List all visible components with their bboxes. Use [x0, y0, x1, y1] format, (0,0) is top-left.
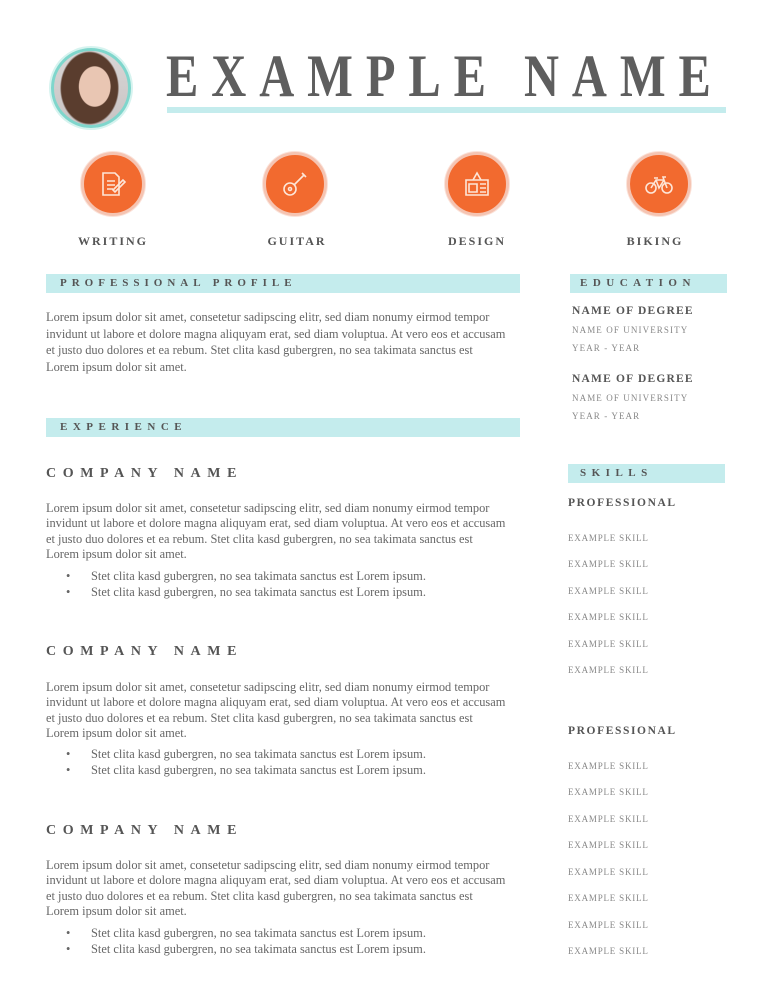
bullets: •: [66, 762, 70, 776]
description: Lorem ipsum dolor sit amet, consetetur sadipscing elitr, sed diam nonumy eirmod tempor: [46, 501, 489, 515]
skills list: EXAMPLE SKILL: [568, 920, 649, 930]
bullets: Stet clita kasd gubergren, no sea takimata sanctus est Lorem ipsum.: [91, 569, 426, 583]
degree 2: NAME OF DEGREE: [572, 373, 694, 385]
heading: experience: EXPERIENCE: [60, 421, 187, 433]
job 3: [46, 823, 506, 956]
skills list: EXAMPLE SKILL: [568, 761, 649, 771]
bullets: Stet clita kasd gubergren, no sea takimata sanctus est Lorem ipsum.: [91, 926, 426, 940]
bullets: •: [66, 584, 70, 598]
heading: professional profile: [46, 274, 520, 293]
description: invidunt ut labore et dolore magna aliquyam erat, sed diam voluptua. At vero eos et accusam: [46, 516, 505, 530]
description: Lorem ipsum dolor sit amet.: [46, 547, 187, 561]
bullets: •: [66, 926, 70, 940]
profile text: Lorem ipsum dolor sit amet, consetetur sadipscing elitr, sed diam nonumy eirmod tempor: [46, 310, 489, 324]
heading: education: [570, 274, 727, 293]
description: Lorem ipsum dolor sit amet, consetetur sadipscing elitr, sed diam nonumy eirmod tempor: [46, 680, 489, 694]
skills list: EXAMPLE SKILL: [568, 639, 649, 649]
bullets: [66, 747, 426, 776]
company name: COMPANY NAME: [46, 823, 243, 838]
skills list: EXAMPLE SKILL: [568, 586, 649, 596]
skills list: EXAMPLE SKILL: [568, 665, 649, 675]
profile text: Lorem ipsum dolor sit amet.: [46, 360, 187, 374]
bullets: [66, 926, 426, 956]
bullets: [66, 569, 426, 598]
skills list: EXAMPLE SKILL: [568, 533, 649, 543]
heading: experience: [46, 418, 520, 437]
heading: skills: SKILLS: [580, 467, 653, 479]
skills list: EXAMPLE SKILL: [568, 893, 649, 903]
skills list: EXAMPLE SKILL: [568, 559, 649, 569]
heading: professional profile: PROFESSIONAL PROFILE: [60, 277, 297, 289]
description: invidunt ut labore et dolore magna aliquyam erat, sed diam voluptua. At vero eos et accusam: [46, 695, 505, 709]
title: EXAMPLE NAME: [166, 43, 724, 109]
skills list: EXAMPLE SKILL: [568, 814, 649, 824]
education entries: [572, 305, 694, 421]
education entries: NAME OF UNIVERSITY: [572, 325, 688, 335]
profile text: et justo duo dolores et ea rebum. Stet clita kasd gubergren, no sea takimata sanctus est: [46, 343, 473, 357]
bullets: Stet clita kasd gubergren, no sea takimata sanctus est Lorem ipsum.: [91, 942, 426, 956]
professional group 1: PROFESSIONAL: [568, 497, 677, 509]
degree 1: NAME OF DEGREE: [572, 305, 694, 317]
icon: design: [445, 152, 509, 216]
education entries: NAME OF UNIVERSITY: [572, 393, 688, 403]
heading: education: EDUCATION: [580, 277, 696, 289]
job 2: [46, 644, 506, 776]
bullets: •: [66, 747, 70, 761]
photo: [51, 48, 131, 128]
hobby icons: [78, 151, 692, 248]
profile text: invidunt ut labore et dolore magna aliquyam erat, sed diam voluptua. At vero eos et accusam: [46, 327, 505, 341]
label: guitar: GUITAR: [267, 234, 327, 248]
bullets: Stet clita kasd gubergren, no sea takimata sanctus est Lorem ipsum.: [91, 584, 426, 598]
description: [46, 858, 506, 918]
skills list: EXAMPLE SKILL: [568, 612, 649, 622]
skills list: [568, 497, 677, 956]
description: Lorem ipsum dolor sit amet.: [46, 904, 187, 918]
title underline: [167, 107, 726, 113]
icon: biking: [627, 152, 691, 216]
description: et justo duo dolores et ea rebum. Stet clita kasd gubergren, no sea takimata sanctus est: [46, 889, 473, 903]
bullets: •: [66, 942, 70, 956]
skills list: EXAMPLE SKILL: [568, 946, 649, 956]
bullets: •: [66, 569, 70, 583]
label: writing: WRITING: [78, 234, 148, 248]
bullets: Stet clita kasd gubergren, no sea takimata sanctus est Lorem ipsum.: [91, 747, 426, 761]
description: et justo duo dolores et ea rebum. Stet clita kasd gubergren, no sea takimata sanctus est: [46, 532, 473, 546]
skills list: EXAMPLE SKILL: [568, 787, 649, 797]
description: et justo duo dolores et ea rebum. Stet clita kasd gubergren, no sea takimata sanctus est: [46, 711, 473, 725]
education entries: YEAR - YEAR: [572, 411, 640, 421]
company name: COMPANY NAME: [46, 466, 243, 481]
description: [46, 501, 506, 561]
skills list: EXAMPLE SKILL: [568, 840, 649, 850]
description: Lorem ipsum dolor sit amet, consetetur sadipscing elitr, sed diam nonumy eirmod tempor: [46, 858, 489, 872]
job 1: [46, 466, 506, 598]
professional group 2: PROFESSIONAL: [568, 725, 677, 737]
profile text: [46, 310, 506, 374]
icon: writing: [81, 152, 145, 216]
label: design: DESIGN: [448, 234, 506, 248]
bullets: Stet clita kasd gubergren, no sea takimata sanctus est Lorem ipsum.: [91, 762, 426, 776]
icon: guitar: [263, 152, 327, 216]
company name: COMPANY NAME: [46, 644, 243, 659]
skills list: EXAMPLE SKILL: [568, 867, 649, 877]
description: [46, 680, 506, 740]
education entries: YEAR - YEAR: [572, 343, 640, 353]
description: invidunt ut labore et dolore magna aliquyam erat, sed diam voluptua. At vero eos et accusam: [46, 873, 505, 887]
label: biking: BIKING: [627, 234, 683, 248]
heading: skills: [568, 464, 725, 483]
description: Lorem ipsum dolor sit amet.: [46, 726, 187, 740]
